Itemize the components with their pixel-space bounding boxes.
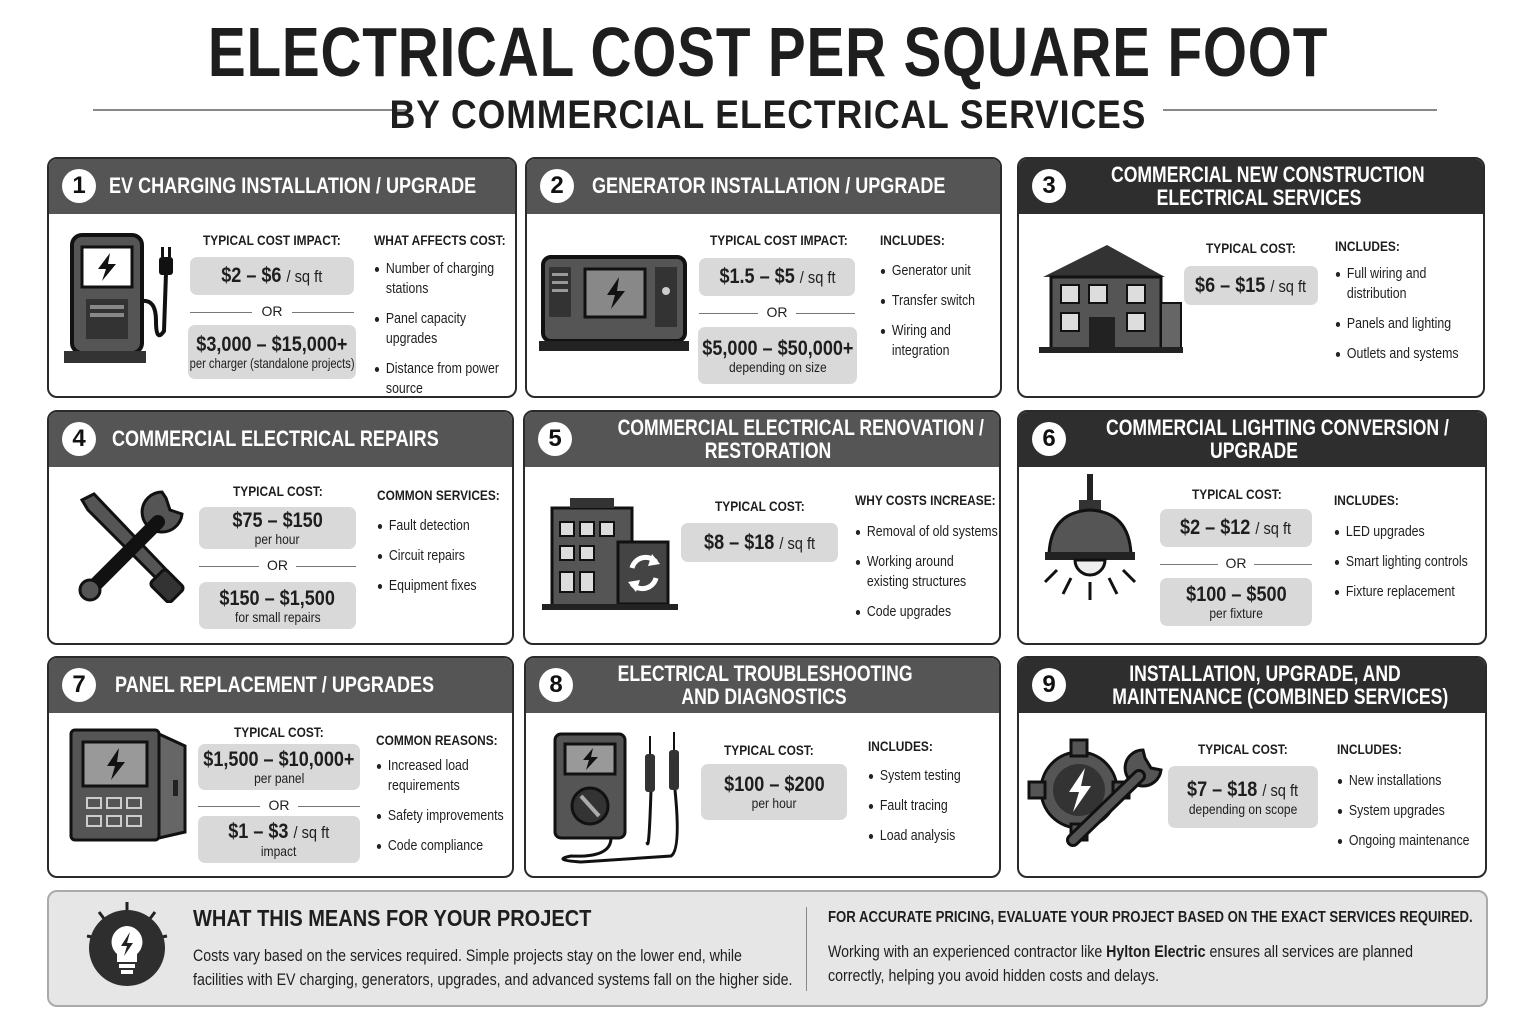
panel 5: renovation: $8 – $18 / sq ft [704,530,815,554]
panel 6: lighting: Fixture replacement [1346,584,1455,600]
left text: facilities with EV charging, generators, upgrades, and advanced systems fall on the higher side. [193,971,792,989]
header 5 [525,412,999,467]
header 2: GENERATOR INSTALLATION / UPGRADE [592,173,945,198]
panel 9: combined services: Ongoing maintenance [1349,833,1470,849]
panel 6: lighting: $2 – $12 / sq ft [1180,516,1292,539]
panel 6: lighting: Smart lighting controls [1346,554,1468,570]
why costs increase: WHY COSTS INCREASE: [855,492,996,508]
panel 1: EV charging: Number of charging stations [386,261,494,297]
panel 1: EV charging [47,157,517,398]
panel 2: generator: Transfer switch [892,293,975,309]
panel 5: renovation: Working around existing structures [867,554,966,590]
panel 6: lighting: $100 – $500 [1186,583,1286,606]
header 7 [49,658,512,713]
icon: building [1039,245,1183,353]
includes: INCLUDES: [1334,492,1399,508]
right text: Working with an experienced contractor like Hylton Electric ensures all services are planned [828,943,1413,961]
icon: renovation building [542,498,678,610]
header 4: COMMERCIAL ELECTRICAL REPAIRS [112,426,439,451]
header 3: COMMERCIAL NEW CONSTRUCTION [1111,162,1425,187]
panel 8: troubleshooting: Fault tracing [880,798,948,814]
header 3: 3 [1042,172,1056,199]
header 9: INSTALLATION, UPGRADE, AND [1129,661,1401,686]
bottom summary box [47,890,1488,1007]
header 7: 7 [72,671,86,698]
panel 7: panel replacement: Code compliance [388,838,483,854]
cost: TYPICAL COST: [233,483,323,499]
panel 3: new construction: Full wiring and distribution [1347,266,1426,302]
cost: TYPICAL COST: [1192,486,1282,502]
panel 2: generator: $1.5 – $5 / sq ft [719,265,835,288]
panel 1: EV charging: Distance from power source [386,361,499,397]
header 9: MAINTENANCE (COMBINED SERVICES) [1112,684,1448,709]
panel 4: repairs: Fault detection [389,518,470,534]
panel 8: troubleshooting: Load analysis [880,828,955,844]
panel 8: troubleshooting [524,656,1001,878]
panel 8: troubleshooting: System testing [880,768,961,784]
panel 5: renovation: Removal of old systems [867,524,998,540]
panel 1: EV charging: Panel capacity upgrades [386,311,466,347]
panel 2: generator: OR [766,304,788,320]
panel 6: lighting: LED upgrades [1346,524,1425,540]
cost impact: TYPICAL COST IMPACT: [710,232,848,248]
right text: correctly, helping you avoid hidden costs and delays. [828,967,1159,985]
header 8: 8 [549,671,563,698]
panel 7: panel replacement [47,656,514,878]
header 6: UPGRADE [1210,438,1298,463]
icon: electrical panel [70,728,186,842]
header 2: 2 [550,172,564,199]
panel 2: generator: Generator unit [892,263,971,279]
header 8: AND DIAGNOSTICS [681,684,847,709]
panel 4: repairs: OR [267,557,288,573]
panel 6: lighting: OR [1226,555,1246,571]
icon: light bulb [86,902,168,986]
left text [193,947,792,989]
icon: gear and wrench [1028,738,1163,847]
panel 4: repairs: Circuit repairs [389,548,465,564]
panel 7: panel replacement: $1,500 – $10,000+ [203,748,355,771]
subtitle: BY COMMERCIAL ELECTRICAL SERVICES [390,93,1146,137]
common services: COMMON SERVICES: [377,487,500,503]
cost: TYPICAL COST: [234,724,324,740]
panel 5: renovation: Code upgrades [867,604,951,620]
panel 7: panel replacement: impact [261,843,297,859]
panel 4: repairs: per hour [255,531,300,547]
panel 8: troubleshooting: per hour [752,795,796,811]
panel 9: combined services: depending on scope [1189,800,1297,816]
header 3: ELECTRICAL SERVICES [1157,185,1361,210]
panel 4: repairs [47,410,514,645]
panel 7: panel replacement: per panel [254,770,304,786]
panel 7: panel replacement: $1 – $3 / sq ft [228,820,330,843]
left text: Costs vary based on the services required. Simple projects stay on the lower end, while [193,947,742,965]
header 5: 5 [548,425,562,452]
panel 4: repairs: $75 – $150 [232,509,323,532]
panel 6: lighting [1017,410,1487,645]
header 1: EV CHARGING INSTALLATION / UPGRADE [109,173,476,198]
title: ELECTRICAL COST PER SQUARE FOOT [208,13,1328,91]
panel 9: combined services: New installations [1349,773,1441,789]
header 1 [49,159,515,214]
panel 9: combined services: System upgrades [1349,803,1445,819]
cost: TYPICAL COST: [1198,741,1288,757]
right heading: FOR ACCURATE PRICING, EVALUATE YOUR PROJECT BASED ON THE EXACT SERVICES REQUIRED. [828,909,1473,926]
panel 1: EV charging: OR [262,303,282,319]
header 9: 9 [1042,671,1056,698]
panel 5: renovation [523,410,1001,645]
header 1: 1 [72,172,86,199]
header 5: COMMERCIAL ELECTRICAL RENOVATION / [618,415,984,440]
left heading: WHAT THIS MEANS FOR YOUR PROJECT [193,905,591,931]
includes: INCLUDES: [868,738,933,754]
what affects cost: WHAT AFFECTS COST: [374,232,506,248]
panel 2: generator: depending on size [729,358,826,374]
icon: tools [78,490,184,603]
header 4 [49,412,512,467]
icon: EV charger [64,233,173,363]
icon: generator [539,255,689,351]
panel 4: repairs: for small repairs [235,608,320,624]
header 3 [1019,159,1483,214]
icon: pendant lamp [1044,474,1136,600]
panel 3: new construction: Outlets and systems [1347,346,1459,362]
includes: INCLUDES: [880,232,945,248]
cost: TYPICAL COST: [715,498,805,514]
panel 3: new construction: Panels and lighting [1347,316,1451,332]
right text [828,943,1413,985]
panel 2: generator: Wiring and integration [892,323,951,359]
includes: INCLUDES: [1335,238,1400,254]
header 6: 6 [1042,425,1056,452]
panel 7: panel replacement: Increased load requirements [388,758,469,794]
panel 6: lighting: per fixture [1209,605,1263,621]
header 8 [526,658,999,713]
panel 1: EV charging: $3,000 – $15,000+ [196,333,348,356]
panel 9: combined services [1017,656,1487,878]
icon: multimeter [554,732,679,864]
header 9 [1019,658,1485,713]
panel 4: repairs: $150 – $1,500 [220,586,335,610]
panel 2: generator [525,157,1002,398]
panel 3: new construction [1017,157,1485,398]
panel 1: EV charging: $2 – $6 / sq ft [221,264,323,287]
header 4: 4 [72,425,86,452]
header 8: ELECTRICAL TROUBLESHOOTING [618,661,913,686]
panel 2: generator: $5,000 – $50,000+ [702,336,853,360]
panel 7: panel replacement: OR [268,797,290,813]
cost: TYPICAL COST: [1206,240,1296,256]
includes: INCLUDES: [1337,741,1402,757]
panel 7: panel replacement: Safety improvements [388,808,504,824]
header 2 [527,159,1000,214]
panel 4: repairs: Equipment fixes [389,578,477,594]
cost: TYPICAL COST: [724,742,814,758]
panel 8: troubleshooting: $100 – $200 [724,773,824,796]
cost impact: TYPICAL COST IMPACT: [203,232,341,248]
header 5: RESTORATION [705,438,831,463]
panel 9: combined services: $7 – $18 / sq ft [1187,778,1299,800]
header 6 [1019,412,1485,467]
header 6: COMMERCIAL LIGHTING CONVERSION / [1106,415,1449,440]
panel 1: EV charging: per charger (standalone projects) [190,355,355,371]
common reasons: COMMON REASONS: [376,732,498,748]
header 7: PANEL REPLACEMENT / UPGRADES [115,672,434,697]
panel 3: new construction: $6 – $15 / sq ft [1195,274,1307,296]
